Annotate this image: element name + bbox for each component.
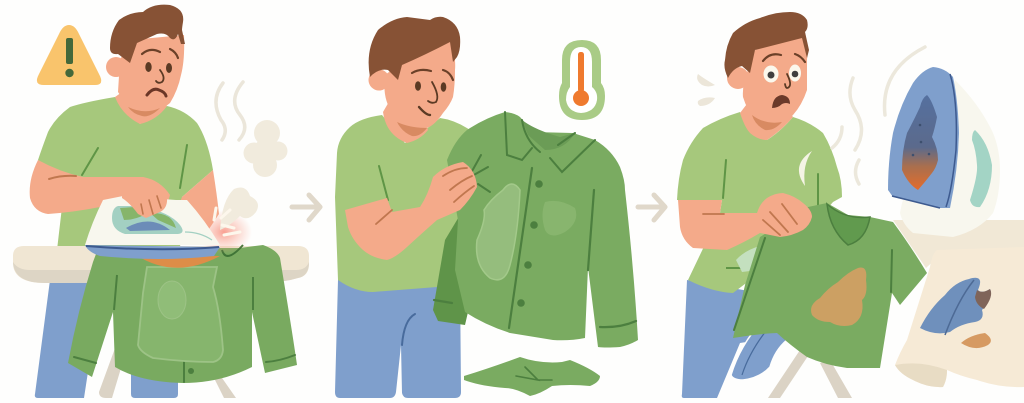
- trousers: [682, 280, 790, 398]
- panel: step 1 ironing: [13, 5, 309, 398]
- face: [763, 54, 805, 62]
- trousers: [35, 280, 178, 398]
- ironing board: [13, 246, 309, 283]
- folded cloth on floor: [464, 357, 600, 396]
- jacket on board: [68, 245, 297, 383]
- fallen sole cover: [731, 320, 787, 380]
- iron upright: [888, 67, 1000, 237]
- head: [697, 12, 809, 140]
- icon: thermometer badge: [559, 40, 605, 120]
- icon: warning triangle: [37, 25, 101, 85]
- jacket: [433, 112, 638, 348]
- panel: step 3 scorched shirt: [677, 12, 1024, 398]
- near arm: [30, 160, 170, 214]
- iron: [85, 196, 220, 259]
- panel: step 2 inspecting jacket: [335, 17, 638, 398]
- stand legs: [768, 350, 852, 398]
- shirt: [677, 112, 842, 293]
- arrow 1: [292, 195, 320, 220]
- head: [368, 17, 460, 143]
- steam: [216, 82, 245, 140]
- arrow 2: [638, 195, 665, 220]
- arm and hand: [345, 162, 477, 260]
- hand on iron: [122, 177, 167, 218]
- head: [106, 5, 185, 124]
- face: [412, 70, 453, 80]
- trousers: [335, 280, 461, 398]
- smoke puffs: [220, 120, 288, 230]
- board legs: [99, 340, 236, 398]
- steam: [832, 47, 925, 184]
- heat glow: [196, 210, 252, 254]
- scorched tee: [733, 203, 927, 368]
- far arm: [175, 170, 219, 235]
- shirt: [38, 97, 213, 250]
- face: [142, 49, 178, 58]
- hand: [678, 193, 812, 250]
- burnt cloth: [895, 247, 1024, 387]
- table: [893, 220, 1024, 268]
- shirt: [335, 115, 470, 292]
- sweat marks: [697, 74, 715, 106]
